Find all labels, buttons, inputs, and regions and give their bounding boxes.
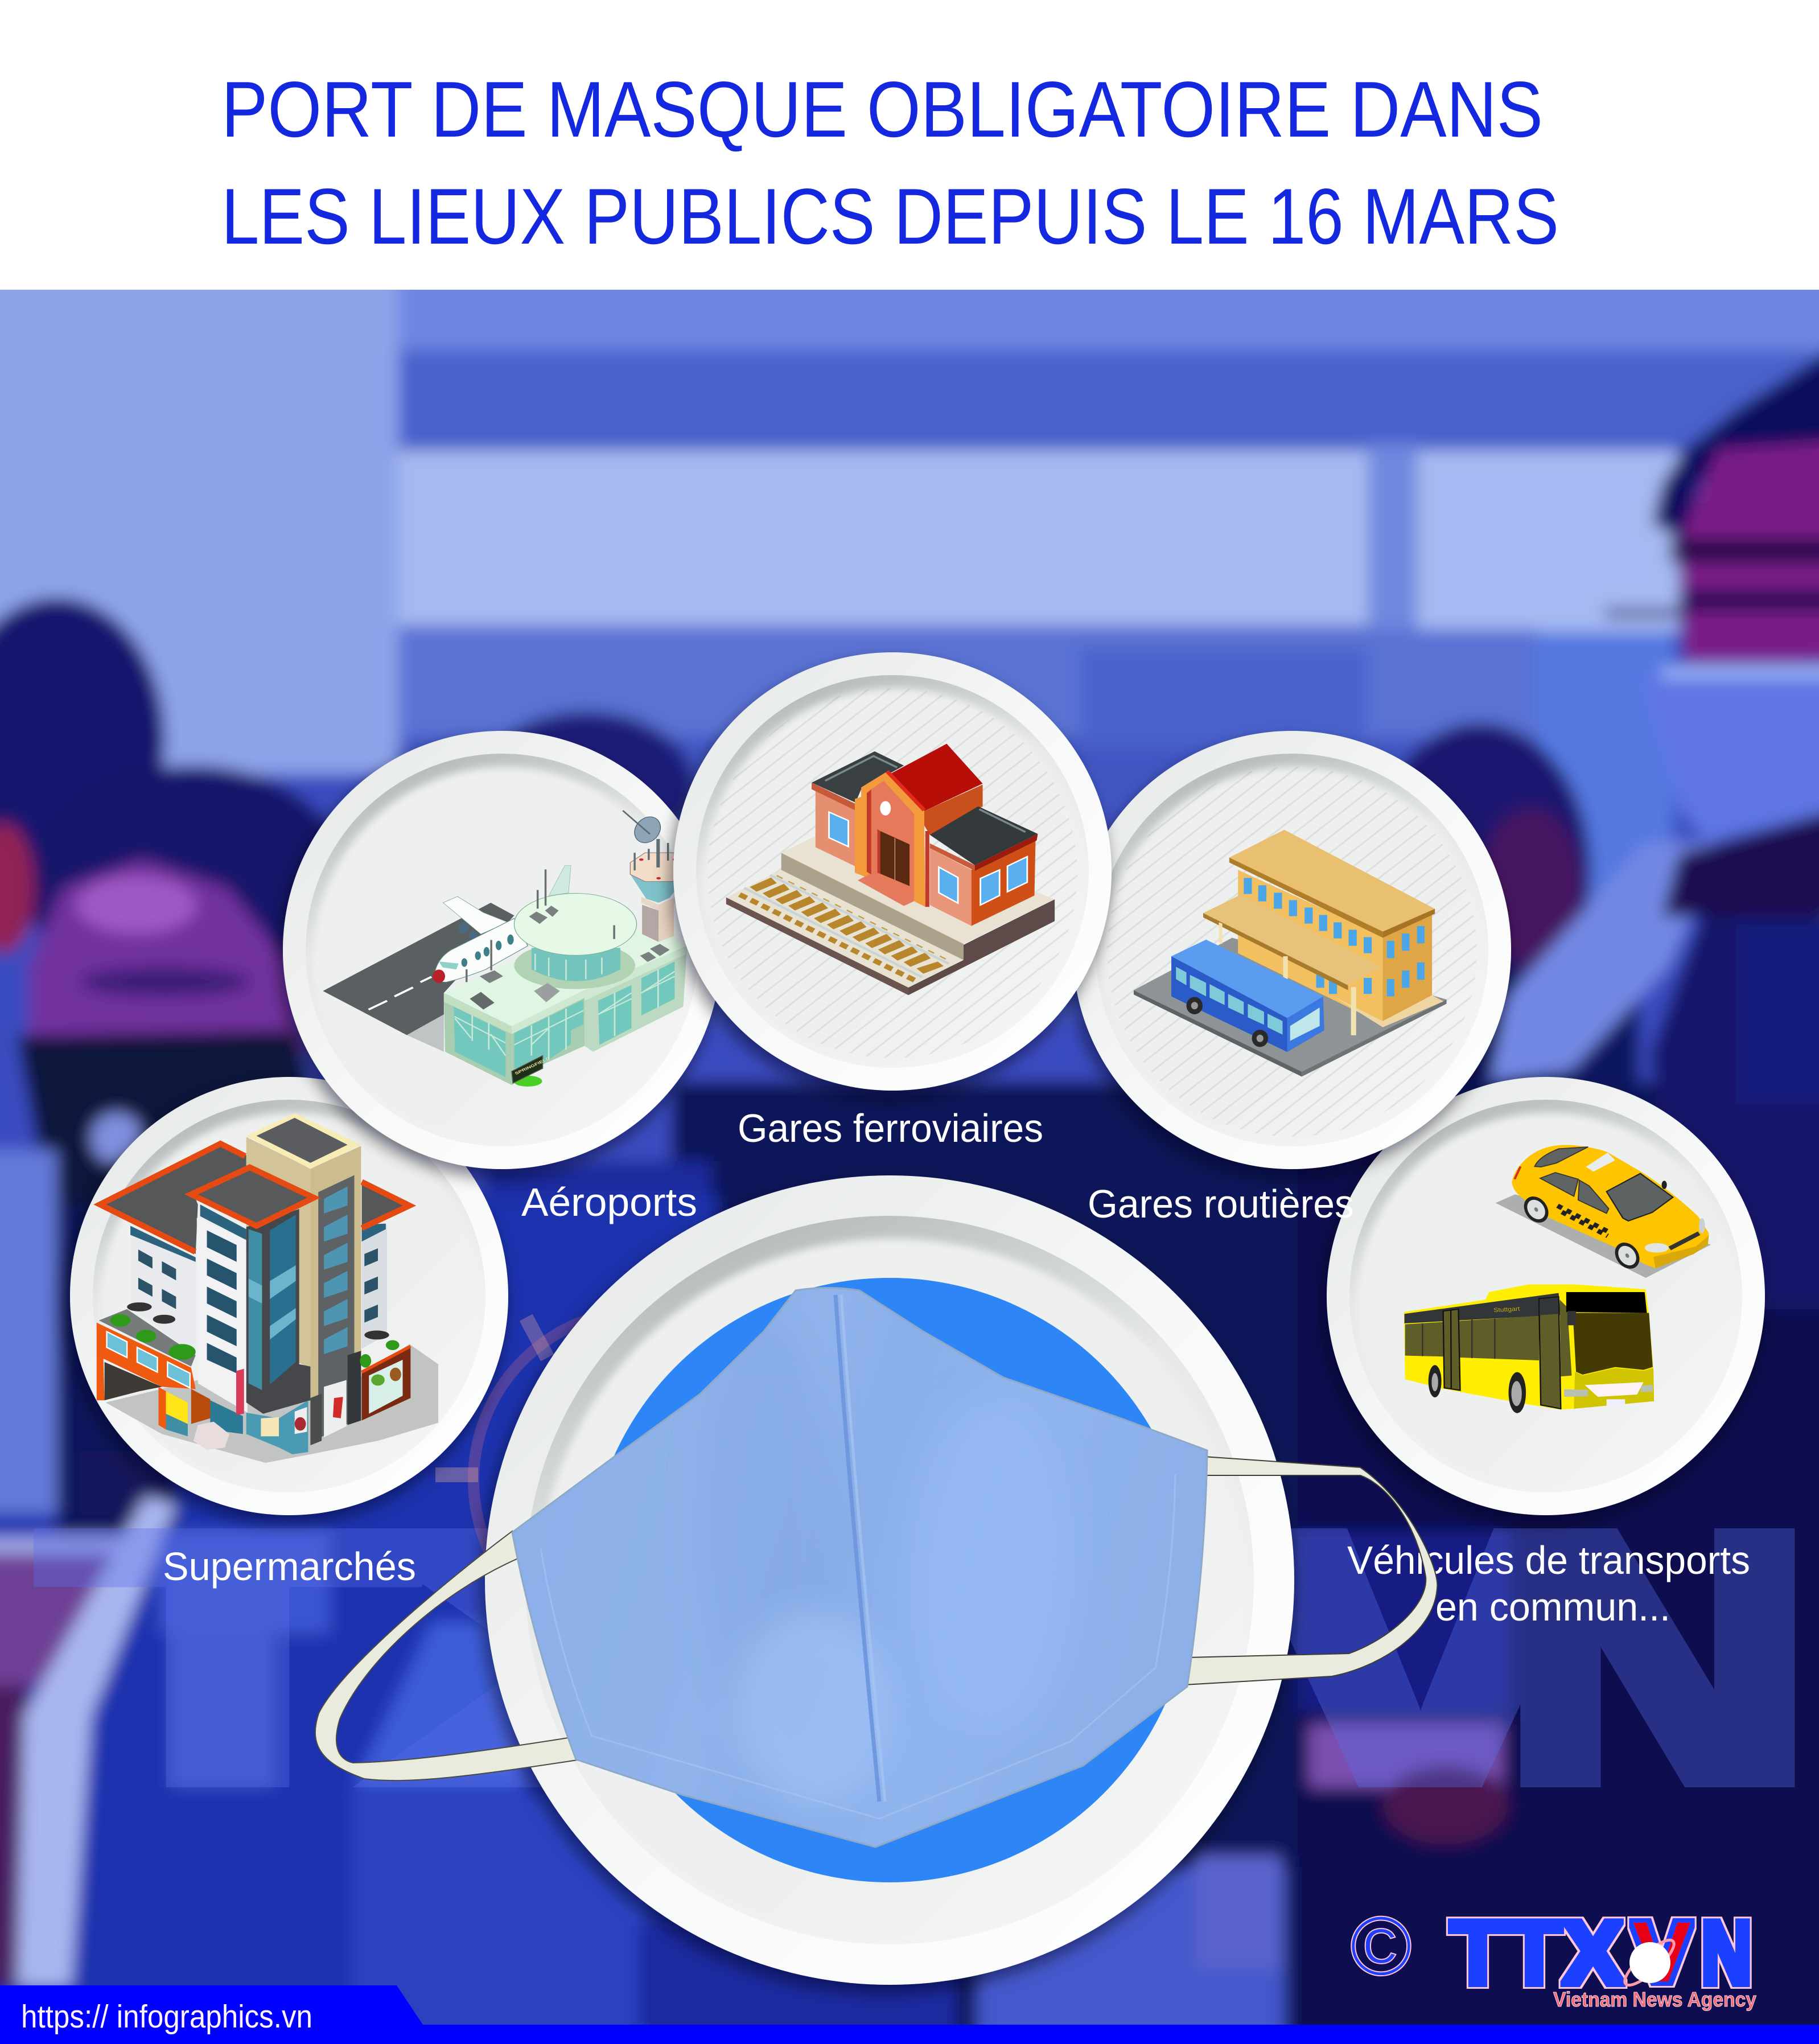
orange podium — [99, 1309, 196, 1367]
title — [221, 65, 1559, 261]
blue bus — [1171, 940, 1323, 1018]
label: Aéroports: Aéroports — [521, 1180, 697, 1224]
panel: bus stations circle — [1073, 731, 1511, 1169]
control tower — [642, 904, 659, 942]
icon: airport terminal with plane — [323, 811, 687, 1087]
purple blotch lower right — [1309, 1725, 1503, 1787]
panel: central mask disc — [485, 1175, 1294, 1985]
right ear loop — [1184, 1457, 1437, 1685]
airport sign — [513, 1076, 542, 1087]
left ear loop — [315, 1531, 578, 1780]
track bed and platform — [726, 870, 964, 988]
TTXVN letters: V — [1633, 1904, 1691, 2000]
red roof — [891, 744, 983, 811]
icon: supermarket building — [97, 1113, 438, 1463]
title: PORT DE MASQUE OBLIGATOIRE DANS — [221, 65, 1543, 154]
icon: taxi and yellow bus: Stuttgart — [1493, 1306, 1521, 1314]
TTXVN letters: N — [1701, 1902, 1752, 2004]
taxi — [1496, 1194, 1711, 1278]
terminal walls — [444, 993, 512, 1085]
panel: railway stations circle — [673, 652, 1112, 1091]
watermark: TTXVN band: V — [1252, 1444, 1590, 1889]
building walls — [1238, 870, 1383, 1024]
icon: railway station — [726, 744, 1055, 995]
label: Gares routières: Gares routières — [1088, 1182, 1354, 1226]
runway — [323, 903, 514, 1035]
label: Gares ferroviaires: Gares ferroviaires — [738, 1106, 1043, 1150]
left roof — [99, 1142, 246, 1254]
label: Véhicules de transports en commun: Véhicules de transports — [1347, 1538, 1750, 1582]
label: Supermarchés: Supermarchés — [163, 1544, 416, 1589]
fabric shading — [700, 1321, 1076, 1804]
watermark: TTXVN band: X — [353, 1444, 926, 1889]
TTXVN letters: TTX — [1450, 1902, 1624, 2004]
watermark: TTXVN band: N — [1505, 1444, 1810, 1889]
watermark: TTXVN band: T — [46, 1444, 410, 1889]
rooftop vents — [480, 906, 670, 983]
left people — [0, 589, 175, 785]
footer bar with url tab — [0, 1985, 1819, 2044]
plane — [443, 896, 508, 934]
TTXVN letters — [1450, 1902, 1752, 2004]
left wing — [816, 789, 855, 866]
rear wing — [362, 1225, 387, 1348]
centre facade — [855, 772, 925, 907]
copyright symbol: © — [1350, 1899, 1412, 1993]
icon: airport terminal with plane: SPRINGFIELD — [514, 1056, 551, 1076]
front roof — [191, 1167, 314, 1226]
upper roof — [1229, 830, 1435, 932]
panel: airports circle — [283, 731, 721, 1169]
sleepers — [750, 878, 944, 974]
right person — [1398, 714, 1600, 978]
lower dark scene — [662, 1072, 1670, 2025]
left wing — [131, 1226, 196, 1355]
right wing — [930, 848, 972, 926]
yellow bus — [1404, 1285, 1654, 1410]
mask body — [512, 1288, 1207, 1847]
stitch lines — [541, 1474, 1175, 1819]
terminal roof — [444, 930, 687, 1026]
dark glass block — [246, 1209, 310, 1414]
url text: https:// infographics.vn — [21, 1998, 312, 2035]
label: Véhicules de transports en commun: en commun... — [1435, 1585, 1670, 1629]
logo: copyright and TTXVN — [1350, 1899, 1756, 2011]
white column — [197, 1218, 248, 1413]
right roof — [362, 1182, 409, 1228]
icon: bus station building — [1134, 830, 1447, 1076]
centre fold — [836, 1295, 879, 1802]
icon: taxi and yellow bus — [1404, 1145, 1711, 1413]
panel: supermarkets circle — [70, 1077, 508, 1515]
header band — [0, 0, 1819, 290]
canopy — [1203, 895, 1381, 985]
watermark: TTXVN band — [46, 1310, 1810, 1889]
label: Véhicules de transports en commun — [1347, 1538, 1750, 1629]
agency name: Vietnam News Agency — [1553, 1988, 1756, 2011]
panel: public transport vehicles circle — [1327, 1077, 1765, 1515]
icon: blue face mask with ear loops — [315, 1288, 1437, 1847]
title: LES LIEUX PUBLICS DEPUIS LE 16 MARS — [221, 172, 1559, 261]
tan tower — [246, 1137, 310, 1369]
ground floor shops — [246, 1400, 308, 1454]
